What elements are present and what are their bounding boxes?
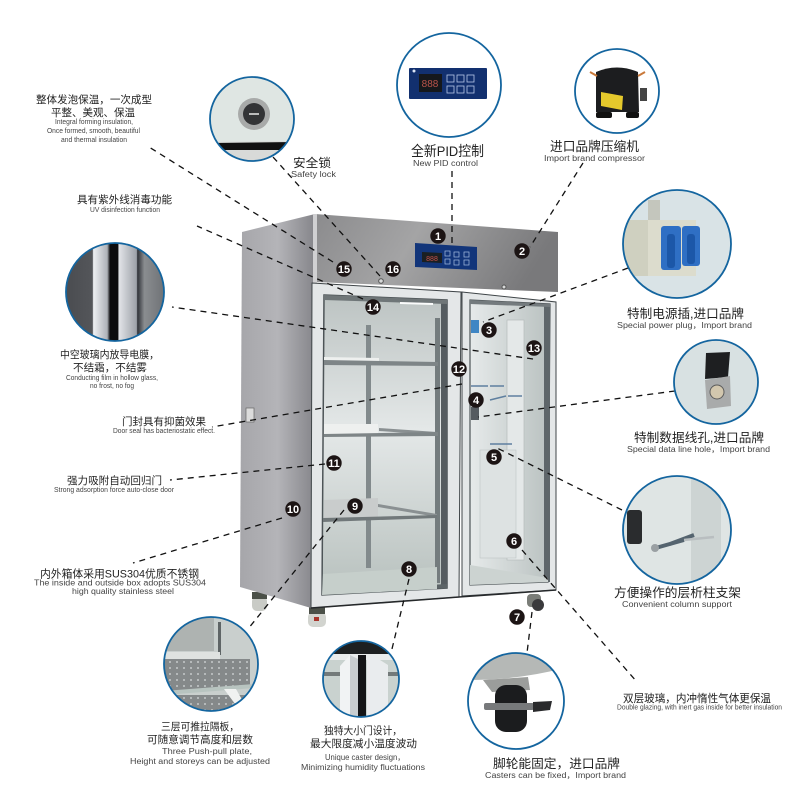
number badges: 8 — [406, 564, 412, 576]
label: SUS304 box: 内外箱体采用SUS304优质不锈钢 — [40, 566, 199, 580]
door locks — [379, 279, 506, 289]
PID control panel: 888 — [426, 256, 438, 263]
label: hollow glass film: 中空玻璃内放导电膜， — [60, 348, 159, 361]
label: SUS304 box: high quality stainless steel — [72, 587, 174, 596]
label: data line hole: 特制数据线孔,进口品牌 — [634, 430, 764, 445]
label: integral insulation: 整体发泡保温，一次成型 — [36, 93, 152, 106]
PID control panel — [415, 243, 477, 270]
label: shelf plate: 可随意调节高度和层数 — [147, 733, 254, 746]
label: PID control: 全新PID控制 — [411, 143, 484, 159]
refrigerated cabinet — [240, 214, 558, 627]
circle: column support — [623, 476, 731, 584]
circle: data line hole — [674, 340, 758, 424]
label: UV disinfection: UV disinfection function — [90, 207, 160, 214]
label: safety lock: 安全锁 — [293, 155, 331, 170]
label: compressor: Import brand compressor — [544, 154, 645, 163]
label: data line hole: Special data line hole，Import brand — [627, 445, 770, 454]
number badges: 15 — [338, 264, 350, 276]
label: integral insulation: Integral forming insulation, — [55, 119, 133, 126]
label: column support: 方便操作的层析柱支架 — [614, 585, 741, 600]
number badges: 3 — [486, 325, 492, 337]
number badges: 9 — [352, 501, 358, 513]
left door — [311, 283, 461, 608]
label: caster wheel: 脚轮能固定，进口品牌 — [493, 756, 620, 771]
number badges: 16 — [387, 264, 399, 276]
number badges: 13 — [528, 343, 540, 355]
label: shelf plate: 三层可推拉隔板， — [161, 720, 239, 733]
label: auto-close door — [54, 474, 175, 494]
label: door design: 独特大小门设计， — [324, 724, 402, 737]
cabinet bottom shadow — [311, 590, 556, 608]
number badges: 14 — [367, 302, 380, 314]
label: door design: Unique caster design， — [325, 753, 405, 762]
circle: safety lock — [210, 77, 294, 161]
label: UV disinfection — [77, 193, 173, 214]
number badges: 5 — [491, 452, 497, 464]
label: hollow glass film: no frost, no fog — [90, 383, 134, 390]
label: door design: Minimizing humidity fluctuations — [301, 763, 425, 772]
label: SUS304 box — [34, 566, 207, 596]
casters and feet — [252, 592, 544, 627]
label: caster wheel: Casters can be fixed，Import brand — [485, 771, 626, 780]
number badges: 10 — [287, 504, 299, 516]
circle: PID control: 888 — [422, 79, 439, 90]
label: door seal: Door seal has bacteriostatic effect. — [113, 428, 215, 435]
number badges: 7 — [514, 612, 520, 624]
circle: power plug — [623, 190, 731, 298]
circle: compressor — [575, 49, 659, 133]
label: door seal — [113, 415, 215, 435]
number badges: 2 — [519, 246, 525, 258]
label: SUS304 box: The inside and outside box adopts SUS304 — [34, 578, 207, 588]
label: data line hole — [627, 430, 770, 454]
label: door seal: 门封具有抑菌效果 — [122, 415, 206, 428]
label: integral insulation: Once formed, smooth, beautiful — [47, 128, 140, 135]
label: double glazing — [617, 691, 782, 712]
top housing — [315, 214, 558, 292]
label: double glazing: Double glazing, with inert gas inside for better insulation — [617, 704, 782, 712]
label: door design: 最大限度减小温度波动 — [310, 737, 417, 750]
label: shelf plate: Height and storeys can be adjusted — [130, 757, 270, 766]
label: auto-close door: 强力吸附自动回归门 — [67, 474, 162, 487]
number badges — [285, 228, 542, 625]
label: column support — [614, 585, 741, 609]
label: column support: Convenient column support — [622, 600, 733, 609]
circle: shelf plate — [164, 617, 258, 711]
number badges: 6 — [511, 536, 517, 548]
label: power plug: 特制电源插,进口品牌 — [627, 306, 744, 321]
label: door design — [301, 724, 425, 772]
label: compressor: 进口品牌压缩机 — [550, 139, 639, 154]
number badges: 1 — [435, 231, 441, 243]
label: power plug: Special power plug，Import brand — [617, 321, 752, 330]
label: double glazing: 双层玻璃，内冲惰性气体更保温 — [623, 691, 771, 705]
label: integral insulation: 平整、美观、保温 — [51, 106, 135, 119]
label: caster wheel — [485, 756, 626, 780]
circle: hollow glass film — [66, 243, 164, 341]
label: PID control: New PID control — [413, 159, 478, 168]
label: power plug — [617, 306, 752, 330]
circle: door design — [323, 641, 399, 717]
label: hollow glass film: Conducting film in hollow glass, — [66, 375, 158, 382]
label: auto-close door: Strong adsorption force auto-close door — [54, 487, 175, 494]
label: hollow glass film: 不结霜，不结雾 — [73, 361, 148, 374]
circle: PID control — [397, 33, 501, 137]
label: safety lock: Safety lock — [291, 170, 337, 179]
label: shelf plate: Three Push-pull plate, — [162, 747, 252, 756]
label: shelf plate — [130, 720, 270, 766]
label: PID control — [411, 143, 484, 168]
number badges: 12 — [453, 364, 465, 376]
number badges: 11 — [328, 458, 340, 470]
number badges: 4 — [473, 395, 480, 407]
label: hollow glass film — [60, 348, 159, 390]
label: compressor — [544, 139, 645, 163]
label: integral insulation — [36, 93, 152, 144]
dashed leader lines — [133, 147, 675, 682]
label: safety lock — [291, 155, 337, 179]
circle: caster wheel — [468, 653, 564, 749]
label: integral insulation: and thermal insulation — [61, 137, 127, 144]
label: UV disinfection: 具有紫外线消毒功能 — [77, 193, 173, 206]
side latch — [246, 408, 254, 422]
right door — [462, 292, 556, 596]
cabinet side panel — [240, 214, 315, 608]
